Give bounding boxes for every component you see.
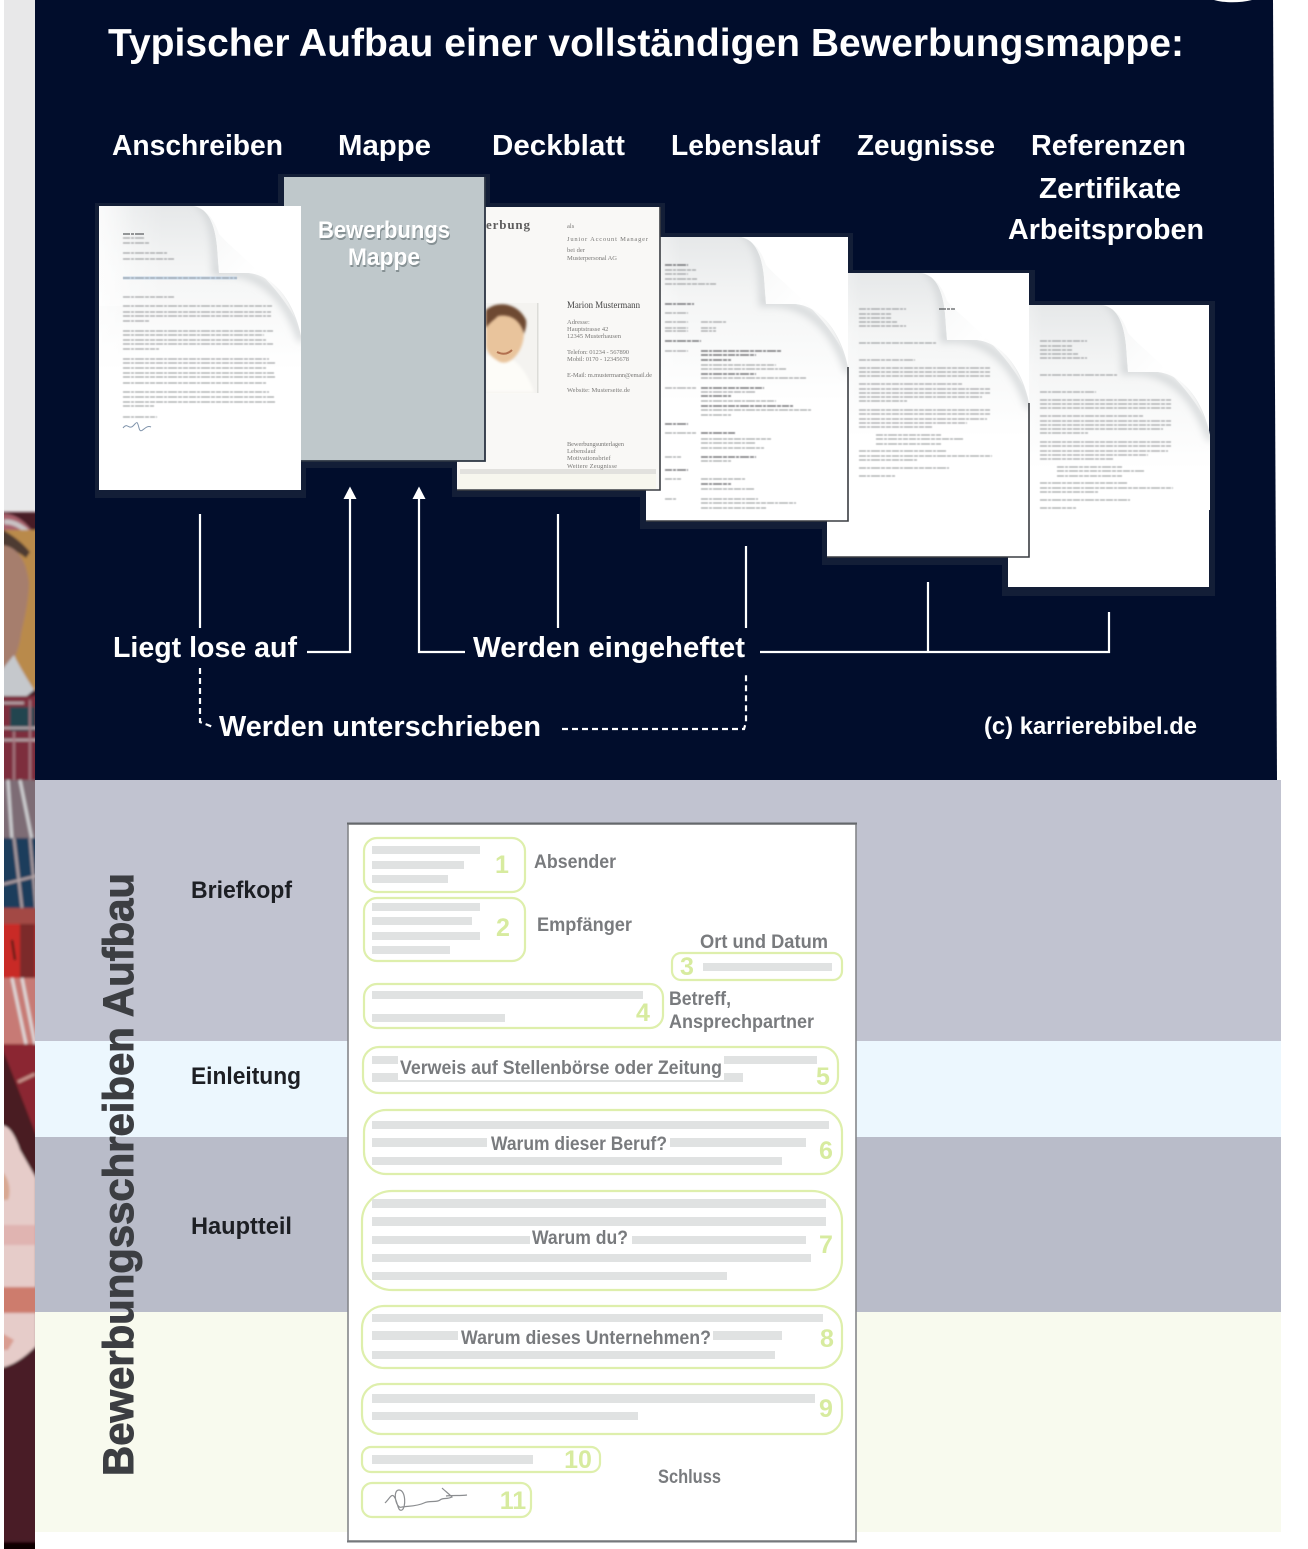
document: Deckblatt page: bei der bbox=[567, 247, 586, 254]
block 3: Ort und Datum bbox=[672, 932, 842, 981]
document: Deckblatt page: 12345 Musterhausen bbox=[567, 333, 622, 340]
document: Deckblatt page: E-Mail: m.mustermann@email.de bbox=[567, 372, 652, 379]
block 10: Schluss greeting bbox=[362, 1446, 721, 1488]
document: Mappe folder: Bewerbungs bbox=[318, 217, 450, 244]
band: Schluss bbox=[35, 1312, 1281, 1532]
label: Werden eingeheftet: Werden eingeheftet bbox=[473, 632, 745, 664]
block 11: signature bbox=[362, 1483, 531, 1517]
decorative arc top right bbox=[1214, 0, 1252, 2]
arrow: Werden eingeheftet to Mappe bbox=[412, 486, 465, 652]
label: Deckblatt: Deckblatt bbox=[492, 130, 625, 162]
block 7: Warum du: Warum du? bbox=[532, 1228, 628, 1249]
block 7: Warum du bbox=[362, 1191, 842, 1290]
document: Mappe folder bbox=[284, 177, 485, 461]
block 4: Betreff, Ansprechpartner: 4 bbox=[636, 999, 650, 1027]
document: Deckblatt page: Adresse: bbox=[567, 319, 590, 326]
label: Anschreiben: Anschreiben bbox=[112, 130, 283, 162]
block 6: Warum dieser Beruf: 6 bbox=[819, 1137, 833, 1165]
document: Mappe folder: Mappe bbox=[349, 246, 421, 273]
block 11: signature: 11 bbox=[500, 1487, 526, 1515]
block 10: Schluss greeting: Schluss bbox=[658, 1467, 721, 1488]
document: Referenzen page bbox=[1008, 301, 1211, 587]
photo portrait bbox=[486, 303, 538, 393]
document: Deckblatt page: Bewerbungsunterlagen bbox=[567, 441, 625, 448]
label: Liegt lose auf: Liegt lose auf bbox=[113, 632, 297, 664]
dashed line: right signature connector bbox=[562, 672, 746, 729]
arrow: Liegt lose auf to Mappe bbox=[307, 486, 356, 652]
block 2: Empfänger bbox=[364, 898, 633, 961]
block 8: Warum dieses Unternehmen: 8 bbox=[820, 1325, 834, 1353]
section label: Briefkopf: Briefkopf bbox=[191, 877, 293, 904]
label: Referenzen: Referenzen bbox=[1031, 130, 1186, 162]
band: Einleitung bbox=[35, 1041, 1281, 1137]
block 9: closing paragraph bbox=[362, 1384, 842, 1434]
block 2: Empfänger: Empfänger bbox=[537, 915, 633, 936]
label: Arbeitsproben: Arbeitsproben bbox=[1008, 214, 1204, 246]
band: Briefkopf bbox=[35, 780, 1281, 1041]
document: Deckblatt page: Mobil: 0170 - 12345678 bbox=[567, 356, 629, 363]
dashed line: left signature connector bbox=[200, 668, 213, 727]
block 6: Warum dieser Beruf: Warum dieser Beruf? bbox=[491, 1134, 667, 1155]
document frames bbox=[95, 174, 1215, 596]
block 4: Betreff, Ansprechpartner: Betreff, bbox=[669, 989, 731, 1010]
document: Deckblatt page: erbung bbox=[486, 217, 530, 232]
line: Zeugnisse and Referenzen connector bbox=[760, 582, 1109, 652]
block 10: Schluss greeting: 10 bbox=[564, 1446, 592, 1474]
document: Lebenslauf page bbox=[646, 233, 849, 521]
panel: dark header background bbox=[35, 0, 1277, 780]
document: Deckblatt page: Weitere Zeugnisse bbox=[567, 463, 617, 470]
block 5: Verweis bbox=[363, 1047, 838, 1093]
panel: letter sheet bbox=[347, 824, 857, 1542]
block 1: Absender: Absender bbox=[534, 852, 617, 873]
credit: (c) karrierebibel.de bbox=[984, 713, 1197, 740]
label: Zertifikate: Zertifikate bbox=[1039, 173, 1181, 205]
label: Zeugnisse: Zeugnisse bbox=[857, 130, 995, 162]
title: Typischer Aufbau einer vollständigen Bewerbungsmappe: bbox=[108, 22, 1184, 65]
document: Deckblatt page: Hauptstrasse 42 bbox=[567, 326, 608, 333]
document: Deckblatt page: Junior Account Manager bbox=[567, 236, 649, 243]
block 2: Empfänger: 2 bbox=[496, 914, 510, 942]
document: Deckblatt page: Marion Mustermann bbox=[567, 301, 640, 311]
line: Deckblatt connector bbox=[557, 514, 559, 628]
block 8: Warum dieses Unternehmen bbox=[362, 1306, 842, 1368]
block 4: Betreff, Ansprechpartner bbox=[364, 984, 815, 1033]
block 5: Verweis: Verweis auf Stellenbörse oder Zeitung bbox=[400, 1058, 722, 1079]
document: Deckblatt page: Musterpersonal AG bbox=[567, 255, 617, 262]
block 3: Ort und Datum: Ort und Datum bbox=[700, 932, 828, 953]
band: Hauptteil bbox=[35, 1137, 1281, 1312]
block 1: Absender: 1 bbox=[495, 851, 509, 879]
photo strip: person at left edge bbox=[4, 0, 35, 1549]
block 7: Warum du: 7 bbox=[819, 1231, 833, 1259]
document: Deckblatt page: Telefon: 01234 - 567890 bbox=[567, 349, 629, 356]
line: Lebenslauf connector bbox=[745, 546, 747, 628]
document: Deckblatt page: Lebenslauf bbox=[567, 448, 597, 455]
document: Deckblatt page bbox=[457, 207, 660, 490]
label: Mappe: Mappe bbox=[338, 130, 431, 162]
document: Mappe folder: Bewerbungs bbox=[319, 219, 451, 246]
block 4: Betreff, Ansprechpartner: Ansprechpartner bbox=[669, 1012, 815, 1033]
document: Zeugnisse page bbox=[827, 269, 1030, 557]
document: Deckblatt page: als bbox=[567, 223, 575, 230]
block 6: Warum dieser Beruf bbox=[364, 1110, 842, 1174]
section label: Hauptteil: Hauptteil bbox=[191, 1213, 292, 1240]
label: Werden unterschrieben: Werden unterschrieben bbox=[219, 711, 541, 743]
line: Anschreiben connector bbox=[199, 514, 201, 628]
block 3: Ort und Datum: 3 bbox=[680, 953, 694, 981]
section label: Einleitung: Einleitung bbox=[191, 1063, 301, 1090]
document: Mappe folder: Mappe bbox=[348, 244, 420, 271]
label: Lebenslauf: Lebenslauf bbox=[671, 130, 820, 162]
block 1: Absender bbox=[364, 838, 617, 892]
vertical heading: Bewerbungsschreiben Aufbau bbox=[95, 873, 143, 1476]
document: Deckblatt page: Website: Musterseite.de bbox=[567, 387, 630, 394]
document: Deckblatt page: Motivationsbrief bbox=[567, 455, 612, 462]
block 8: Warum dieses Unternehmen: Warum dieses Unternehmen? bbox=[461, 1328, 711, 1349]
block 5: Verweis: 5 bbox=[816, 1063, 830, 1091]
block 9: closing paragraph: 9 bbox=[819, 1395, 833, 1423]
document: Anschreiben page bbox=[99, 202, 302, 490]
